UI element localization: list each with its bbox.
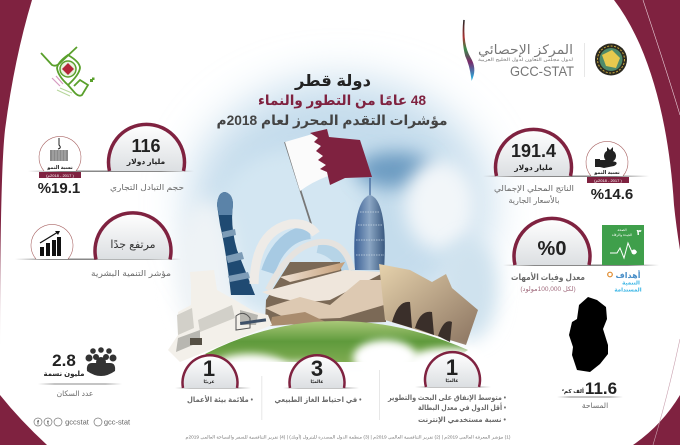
footnote sources: (1) مؤشر المعرفة العالمي 2019م | (2) تقرير التنافسية العالمي 2019م | (3) منظمة الدول المصدرة للبترول (أوبك) | (4) تقرير التنافسية للسفر والسياحة العالمي 2019م [186, 434, 511, 440]
panel: business environment: 1 [203, 356, 215, 381]
arch gauge [95, 213, 171, 260]
panel: SDG 3 badge: ٣ [637, 228, 642, 237]
panel: trade volume: 116 [131, 136, 161, 156]
logo: GCC emblem [595, 44, 627, 76]
social media handles [34, 418, 131, 426]
panel: area with Qatar map: 11.6 [585, 379, 617, 398]
panel: GDP growth: نسبة النمو [593, 170, 620, 176]
panel: gas reserves [274, 355, 362, 404]
panel: area with Qatar map: المساحة [582, 401, 608, 410]
panel: trade volume: مليار دولار [126, 157, 166, 166]
panel: gas reserves: • في احتياط الغاز الطبيعي [274, 395, 362, 404]
panel: global first rankings: • أقل الدول في معدل البطالة [418, 402, 506, 412]
panel: SDG 3 badge: أهداف [616, 270, 641, 280]
title: 48 عامًا من التطور والنماء [258, 92, 426, 109]
panel: SDG 3 badge: الجيدة والرفاه [612, 233, 632, 237]
logo: GCC-STAT: GCC-STAT [510, 63, 574, 79]
arch gauge [182, 355, 238, 388]
maroon corner: top left [0, 0, 32, 350]
panel: GDP: مليار دولار [513, 163, 553, 172]
dome arches [254, 224, 352, 290]
panel: population: مليون نسمة [43, 371, 85, 378]
green globe [205, 321, 468, 362]
panel: area with Qatar map [557, 297, 623, 410]
panel: maternal mortality: (لكل 100,000مولود) [520, 286, 576, 293]
title: مؤشرات التقدم المحرز لعام 2018م [217, 112, 448, 129]
arch gauge [496, 129, 571, 176]
panel: global first rankings: • نسبة مستخدمي الإنترنت [418, 415, 506, 424]
panel: SDG 3 badge: المستدامة [614, 288, 642, 294]
panel: GDP: الناتج المحلي الإجمالي [494, 184, 574, 194]
panel: population: عدد السكان [57, 389, 93, 398]
panel: trade growth: ( 2017 - 2018م) [46, 173, 74, 178]
panel: area with Qatar map: ألف كم² [562, 387, 584, 395]
panel: global first rankings: 1 [446, 355, 458, 380]
panel: maternal mortality: %0 [538, 238, 566, 260]
maroon corner: bottom left [0, 395, 47, 445]
maroon corner: bottom right [633, 395, 680, 445]
icon: heartbeat [610, 243, 637, 258]
flag pole [285, 142, 314, 233]
panel: global first rankings: عالميًا [446, 378, 458, 383]
social media handles: f [37, 420, 40, 426]
panel: human development index: مرتفع جدًا [110, 239, 156, 251]
title: دولة قطر [294, 73, 371, 90]
panel: GDP growth [586, 141, 633, 203]
logo: GCC-STAT: المركز الإحصائي [478, 42, 573, 58]
panel: GDP growth: ( 2017 - 2018م) [594, 178, 622, 183]
panel: GDP [483, 129, 649, 205]
panel: trade growth: نسبة النمو [46, 165, 73, 171]
panel: business environment: • ملائمة بيئة الأعمال [187, 395, 253, 404]
panel: SDG 3 badge: الصحة [617, 228, 627, 232]
logo: green emblem [41, 47, 94, 96]
panel: maternal mortality: معدل وفيات الأمهات [511, 272, 585, 283]
arch gauge [108, 124, 184, 171]
panel: trade growth [38, 136, 81, 197]
icon: rising bars [40, 231, 61, 256]
arch gauge [289, 355, 344, 388]
Doha tower [354, 178, 385, 270]
logo: GCC-STAT: لدول مجلس التعاون لدول الخليج العربية [478, 57, 573, 62]
panel: human development index [15, 213, 181, 278]
Museum of Islamic Art [168, 270, 272, 362]
icon: container crane [50, 138, 68, 161]
arch gauge [425, 352, 480, 387]
maroon corner: top right [614, 0, 680, 250]
social media handles: gcc-stat [104, 418, 131, 426]
social media handles: gccstat [65, 418, 90, 426]
panel: global first rankings [387, 352, 506, 424]
panel: population: 2.8 [52, 351, 76, 370]
panel: GDP growth: %14.6 [591, 186, 633, 203]
icon: hand holding money bag [595, 147, 617, 168]
panel: population [38, 347, 122, 398]
Qatar flag [285, 129, 372, 191]
panel: GDP: 191.4 [511, 141, 556, 161]
panel: gas reserves: عالميًا [310, 379, 324, 384]
social media handles: t [47, 420, 49, 426]
lower clouds [130, 340, 550, 445]
National Museum [262, 262, 386, 326]
title [217, 73, 448, 129]
panel: GDP: بالأسعار الجارية [509, 195, 559, 205]
panel: trade growth: %19.1 [38, 180, 80, 197]
Aspire torch tower [217, 192, 255, 295]
logo: GCC-STAT [463, 20, 585, 79]
skyline illustration [168, 129, 478, 362]
panel: SDG 3 badge [602, 225, 644, 294]
panel: SDG 3 badge: التنمية [622, 280, 640, 286]
panel: maternal mortality [503, 218, 659, 293]
map of Qatar [569, 297, 608, 372]
icon: group of people [86, 347, 116, 376]
panel: trade volume [28, 124, 194, 192]
panel: trade volume: حجم التبادل التجاري [110, 183, 184, 192]
panel: global first rankings: • متوسط الإنفاق على البحث والتطوير [387, 393, 506, 402]
panel: business environment [175, 355, 253, 404]
panel: gas reserves: 3 [311, 356, 323, 381]
arch gauge [514, 218, 590, 265]
Souq Waqif building [379, 264, 478, 345]
panel: business environment: عربيًا [203, 379, 215, 384]
panel: human development index: مؤشر التنمية البشرية [91, 269, 171, 278]
